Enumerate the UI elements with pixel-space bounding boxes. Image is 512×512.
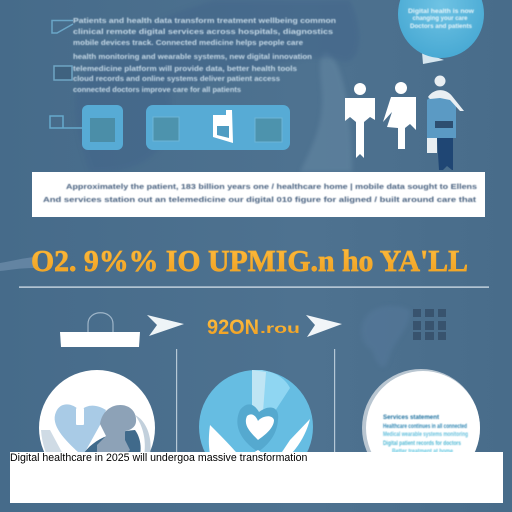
subheading [207,316,300,339]
people figures [345,76,464,170]
subheading: .rou [260,320,300,336]
body text block: cloud records and online systems deliver patient access [73,74,280,83]
figure: person 2 [383,82,416,149]
card: three devices [146,105,290,150]
figure: person 1 [345,83,375,158]
icon: grid [413,309,446,340]
white text panel: Approximately the patient, 183 billion years one / healthcare home | mobile data sought to Ellens [66,182,477,191]
body text block: connected doctors improve care for all patients [73,85,241,94]
bubble text: Doctors and patients [410,24,473,30]
arrow 1 [147,315,184,336]
bubble text [408,9,474,30]
icon: checkbox 2 [54,66,72,80]
circle text lines: Better treatment at home [392,449,454,455]
body text block: telemedicine platform will provide data, better health tools [73,64,297,73]
icon: checkbox 1 [52,20,73,33]
circle text lines: Services statement [383,415,439,421]
card: single device [82,105,123,150]
figure: person 3 [427,76,464,170]
heading: O2. 9%% IO UPMIG.n ho YA'LL [31,243,468,278]
connector icon [50,116,84,128]
background shapes [0,0,359,271]
device cards [50,105,290,150]
body text block: health monitoring and wearable systems, new digital innovation [73,52,312,61]
map silhouette [361,306,410,367]
bubble text: changing your care [412,16,468,22]
white text panel: And services station out an telemedicine our digital 010 figure for aligned / built around care that [43,195,477,204]
body text block [73,16,336,94]
caption box: Digital healthcare in 2025 will undergoa massive transformation [10,452,307,464]
caption box [10,452,503,503]
subheading: 92ON [207,316,259,339]
circle: heart and person [39,370,155,486]
icon: white box with handle [60,313,140,347]
divider [19,286,489,288]
circle text lines: Digital patient records for doctors [383,441,462,447]
arrow 2 [306,315,342,337]
speech bubble [398,0,484,64]
circle text lines: Medical wearable systems monitoring [383,432,468,438]
circle: text [362,369,480,487]
circle: blue heart [199,370,313,484]
body text block: Patients and health data transform treatment wellbeing common [73,16,336,25]
circle text lines [383,415,468,455]
icon: white document [213,110,233,143]
bubble text: Digital health is now [408,9,474,15]
body text block: clinical remote digital services across hospitals, diagnostics [73,27,333,36]
body text block: mobile devices track. Connected medicine helps people care [73,38,303,47]
vertical dividers [176,349,335,454]
circle text lines: Healthcare continues in all connected [383,424,467,430]
white text panel [32,172,485,217]
